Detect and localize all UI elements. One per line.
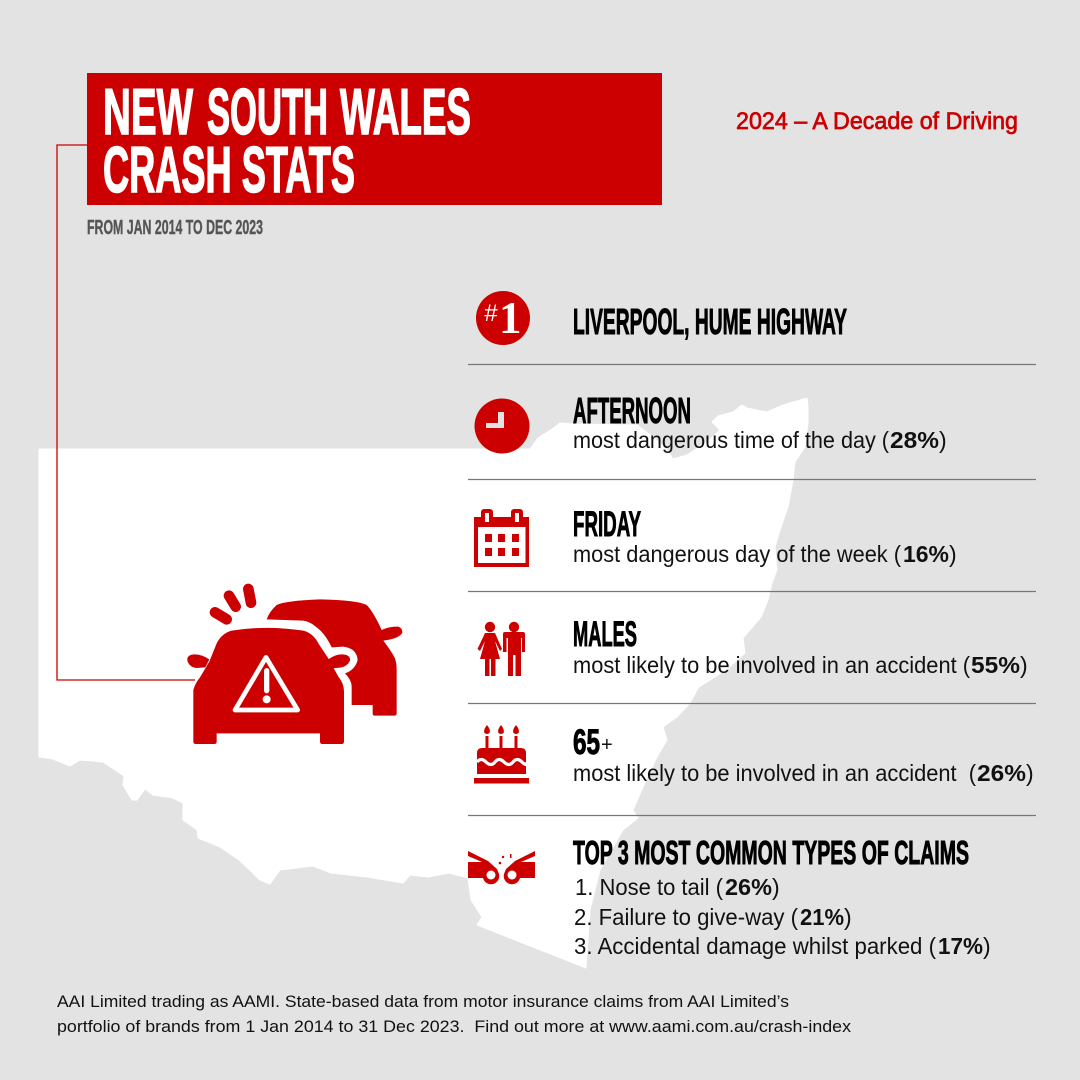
row: age 65+ — [573, 723, 1034, 786]
title banner: WALES — [340, 75, 471, 148]
row: top 3 claim types — [573, 834, 991, 959]
footer note: portfolio of brands from 1 Jan 2014 to 31 Dec 2023. Find out more at www.aami.com.au/crash-index — [57, 1017, 852, 1036]
icon: crashed cars with warning triangle — [187, 589, 402, 744]
row: friday — [573, 505, 957, 567]
icon: birthday cake — [474, 725, 529, 784]
row: afternoon: most dangerous time of the day ( — [573, 427, 889, 453]
row: friday: most dangerous day of the week ( — [573, 541, 901, 567]
row: age 65+: ) — [1026, 760, 1034, 786]
icon: number one badge: 1 — [499, 293, 522, 343]
row: afternoon: ) — [939, 427, 947, 453]
row: top location: LIVERPOOL, HUME HIGHWAY — [573, 301, 847, 342]
title banner: NEW — [103, 75, 193, 148]
row: top 3 claim types: 1. Nose to tail ( — [575, 874, 723, 900]
footer note: AAI Limited trading as AAMI. State-based data from motor insurance claims from AAI Limited’s — [57, 992, 789, 1011]
row: males: MALES — [573, 615, 637, 654]
row: age 65+: 65 — [573, 723, 600, 762]
row: afternoon: AFTERNOON — [573, 390, 691, 431]
icon: calendar — [474, 509, 529, 567]
icon: female and male figures — [478, 622, 525, 676]
row: friday: ) — [949, 541, 957, 567]
row: age 65+: most likely to be involved in an accident ( — [573, 760, 976, 786]
row: males — [573, 615, 1028, 678]
row: males: ) — [1020, 652, 1028, 678]
row: age 65+: 26% — [977, 760, 1026, 786]
footer note — [57, 992, 852, 1036]
icon: number one badge — [476, 291, 530, 345]
row: age 65+: + — [601, 734, 613, 756]
icon: clock — [474, 398, 530, 454]
title banner — [87, 73, 662, 206]
row: top 3 claim types: 21% — [800, 904, 844, 930]
map: New South Wales silhouette — [39, 398, 808, 968]
row: afternoon: 28% — [890, 427, 939, 453]
row: top 3 claim types: ) — [983, 933, 991, 959]
connector line — [57, 145, 195, 680]
subtitle: date range: FROM JAN 2014 TO DEC 2023 — [87, 217, 263, 239]
row: friday: 16% — [903, 541, 949, 567]
row: top 3 claim types: 17% — [938, 933, 983, 959]
dividers — [468, 364, 1036, 816]
row: males: 55% — [971, 652, 1020, 678]
row: males: most likely to be involved in an accident ( — [573, 652, 970, 678]
row: friday: FRIDAY — [573, 505, 641, 544]
row: afternoon — [573, 390, 947, 453]
row: top 3 claim types: 3. Accidental damage whilst parked ( — [574, 933, 936, 959]
row: top 3 claim types: 2. Failure to give-way ( — [574, 904, 798, 930]
heading: decade of driving: 2024 – A Decade of Driving — [736, 108, 1018, 135]
row: top 3 claim types: ) — [772, 874, 780, 900]
icon: head-on collision — [468, 851, 535, 884]
title banner: SOUTH — [207, 75, 328, 148]
row: top 3 claim types: 26% — [725, 874, 772, 900]
icon: number one badge: # — [484, 300, 498, 327]
row: top 3 claim types: ) — [844, 904, 852, 930]
title banner: CRASH STATS — [103, 133, 355, 206]
